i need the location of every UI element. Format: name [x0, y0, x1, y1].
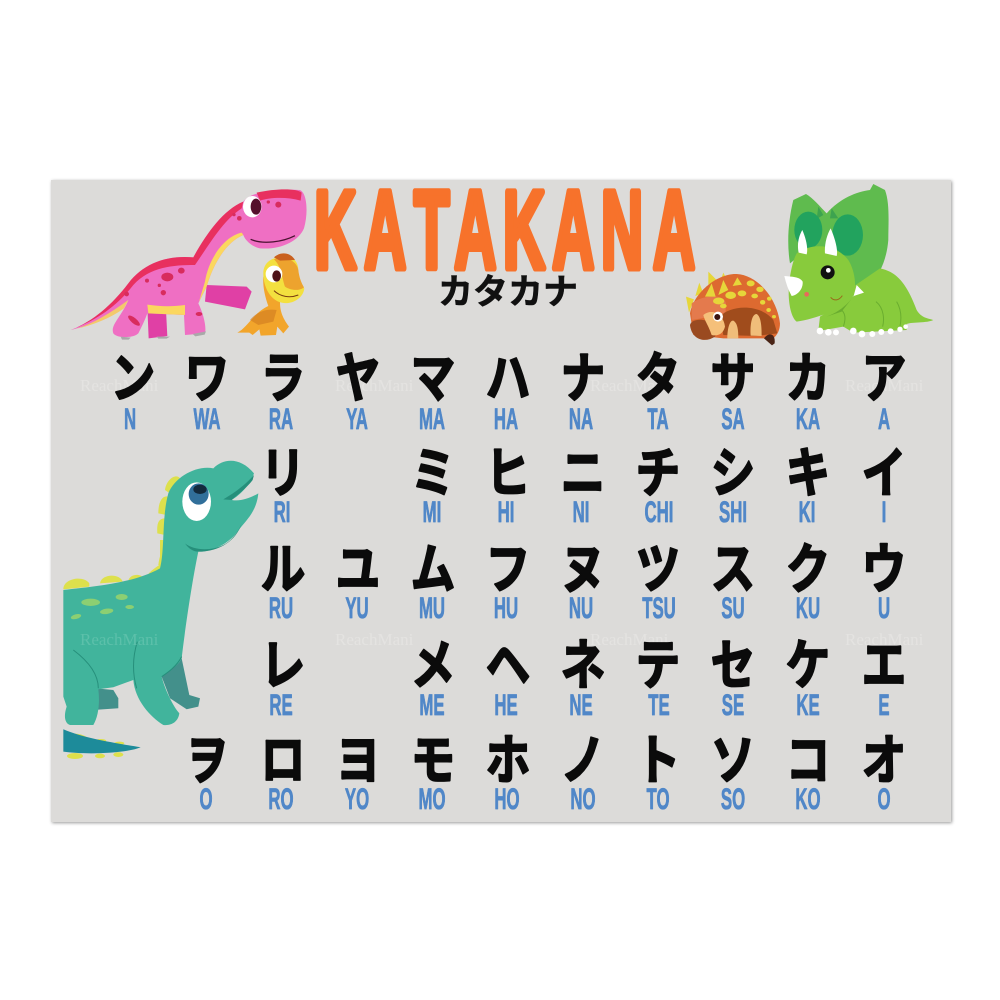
- cell: SA: SA: [721, 403, 745, 436]
- cell: MA: [411, 348, 455, 436]
- cell: I: I: [882, 496, 886, 529]
- cell: KI: KI: [799, 496, 815, 529]
- cell: TSU: TSU: [642, 592, 676, 625]
- cell: U: ウ: [862, 539, 906, 600]
- cell: TSU: ツ: [636, 539, 680, 600]
- cell: ME: [411, 635, 455, 722]
- cell: RO: ロ: [261, 730, 305, 791]
- watermark on teal dinosaur: ReachMani: [80, 630, 159, 649]
- cell: KU: KU: [796, 592, 820, 625]
- cell: SA: サ: [711, 348, 755, 409]
- cell: NA: ナ: [561, 348, 605, 409]
- cell: KA: KA: [796, 403, 820, 436]
- cell: MU: ム: [411, 539, 455, 600]
- subtitle: カタカナ: [438, 273, 578, 312]
- cell: KE: [786, 635, 830, 722]
- cell: WA: WA: [193, 403, 221, 436]
- cell: SU: ス: [711, 539, 755, 600]
- cell: NI: NI: [573, 496, 589, 529]
- cell: SU: SU: [721, 592, 745, 625]
- cell: HI: ヒ: [486, 443, 530, 504]
- cell: WA: [185, 348, 229, 436]
- cell: HU: フ: [486, 539, 530, 600]
- cell: TE: テ: [636, 635, 680, 696]
- cell: KE: ケ: [786, 635, 830, 696]
- cell: A: ア: [862, 348, 906, 409]
- cell: KO: KO: [795, 783, 821, 816]
- chart: katakana grid row 5: [186, 730, 906, 816]
- cell: HI: HI: [498, 496, 514, 529]
- cell: RI: RI: [274, 496, 290, 529]
- chart: katakana grid row 3: [261, 539, 906, 625]
- cell: NO: ノ: [561, 730, 605, 791]
- watermarks: ReachMani: [590, 376, 669, 395]
- cell: O: オ: [862, 730, 906, 791]
- cell: RA: [261, 348, 305, 436]
- cell: HO: ホ: [486, 730, 530, 791]
- cell: KA: カ: [786, 348, 830, 409]
- cell: KO: コ: [786, 730, 830, 791]
- cell: RO: RO: [268, 783, 294, 816]
- cell: TO: TO: [646, 783, 670, 816]
- cell: YO: YO: [345, 783, 369, 816]
- cell: RA: RA: [269, 403, 293, 436]
- cell: YA: YA: [346, 403, 368, 436]
- cell: NU: ヌ: [561, 539, 605, 600]
- cell: YA: ヤ: [336, 348, 380, 409]
- cell: HU: HU: [494, 592, 518, 625]
- cell: SE: [711, 635, 755, 722]
- watermarks: ReachMani: [845, 630, 924, 649]
- cell: O (wo): ヲ: [186, 731, 228, 791]
- cell: N: [111, 348, 155, 436]
- cell: MO: MO: [418, 783, 446, 816]
- cell: TE: TE: [648, 689, 670, 722]
- cell: SO: SO: [721, 783, 745, 816]
- cell: RA: ラ: [261, 348, 305, 409]
- watermarks: ReachMani: [80, 376, 159, 395]
- watermarks: ReachMani: [590, 630, 669, 649]
- cell: NO: NO: [570, 783, 596, 816]
- cell: TO: ト: [636, 730, 680, 791]
- cell: A: [862, 348, 906, 436]
- cell: ME: メ: [411, 635, 455, 696]
- chart: katakana grid row 4: [261, 635, 906, 722]
- cell: NU: NU: [569, 592, 593, 625]
- cell: NE: ネ: [561, 635, 605, 696]
- cell: E: E: [878, 689, 890, 722]
- cell: HE: HE: [494, 689, 518, 722]
- cell: RE: レ: [261, 635, 305, 696]
- cell: N: ン: [111, 348, 155, 409]
- watermarks: ReachMani: [335, 630, 414, 649]
- cell: TA: TA: [647, 403, 669, 436]
- cell: MO: モ: [411, 730, 455, 791]
- cell: RI: リ: [261, 443, 305, 504]
- cell: YA: [336, 348, 380, 436]
- cell: KA: [786, 348, 830, 436]
- cell: U: U: [878, 592, 890, 625]
- cell: WA: ワ: [185, 348, 229, 409]
- cell: E: エ: [862, 635, 906, 696]
- cell: RE: [261, 635, 305, 722]
- cell: YU: YU: [345, 592, 369, 625]
- icon: teal dinosaur: [63, 461, 258, 759]
- cell: TA: タ: [636, 348, 680, 409]
- cell: HE: ヘ: [486, 635, 530, 696]
- cell: E: [862, 635, 906, 722]
- cell: HA: [486, 348, 530, 436]
- cell: HA: HA: [494, 403, 518, 436]
- watermarks: [80, 376, 924, 649]
- icon: armoured dinosaur: [686, 272, 780, 345]
- icon: pink dinosaur: [71, 189, 307, 340]
- cell: MA: マ: [411, 348, 455, 409]
- cell: TE: [636, 635, 680, 722]
- icon: baby orange dinosaur: [237, 253, 304, 336]
- cell: CHI: チ: [636, 443, 680, 504]
- cell: KU: ク: [786, 539, 830, 600]
- panel: grey board: [51, 180, 951, 822]
- cell: I: イ: [862, 443, 906, 504]
- cell: NE: [561, 635, 605, 722]
- cell: YU: ユ: [336, 539, 380, 600]
- cell: ME: ME: [419, 689, 445, 722]
- cell: TA: [636, 348, 680, 436]
- cell: NE: NE: [569, 689, 593, 722]
- cell: O (wo): O: [199, 783, 213, 816]
- cell: RU: RU: [269, 592, 293, 625]
- cell: KI: キ: [786, 443, 830, 504]
- cell: CHI: CHI: [645, 496, 673, 529]
- icon: green triceratops: [784, 184, 933, 337]
- cell: SHI: シ: [711, 443, 755, 504]
- watermarks: ReachMani: [335, 376, 414, 395]
- cell: MA: MA: [419, 403, 445, 436]
- cell: HE: [486, 635, 530, 722]
- cell: NA: [561, 348, 605, 436]
- cell: MU: MU: [419, 592, 445, 625]
- cell: HA: ハ: [486, 348, 530, 409]
- cell: NI: ニ: [561, 443, 605, 504]
- cell: SE: セ: [711, 635, 755, 696]
- cell: A: A: [878, 403, 890, 436]
- cell: HO: HO: [494, 783, 520, 816]
- cell: MI: MI: [423, 496, 441, 529]
- cell: SO: ソ: [711, 730, 755, 791]
- cell: RU: ル: [261, 539, 305, 600]
- cell: NA: NA: [569, 403, 593, 436]
- chart: katakana grid row 1: [111, 348, 906, 436]
- watermarks: ReachMani: [845, 376, 924, 395]
- cell: MI: ミ: [411, 443, 455, 504]
- cell: SHI: SHI: [719, 496, 747, 529]
- cell: N: N: [124, 403, 136, 436]
- cell: YO: ヨ: [336, 730, 380, 791]
- title: KATAKANA: [314, 168, 695, 292]
- cell: SE: SE: [722, 689, 744, 722]
- cell: RE: RE: [269, 689, 293, 722]
- cell: SA: [711, 348, 755, 436]
- cell: KE: KE: [796, 689, 820, 722]
- cell: O: O: [877, 783, 891, 816]
- chart: katakana grid row 2: [261, 443, 906, 529]
